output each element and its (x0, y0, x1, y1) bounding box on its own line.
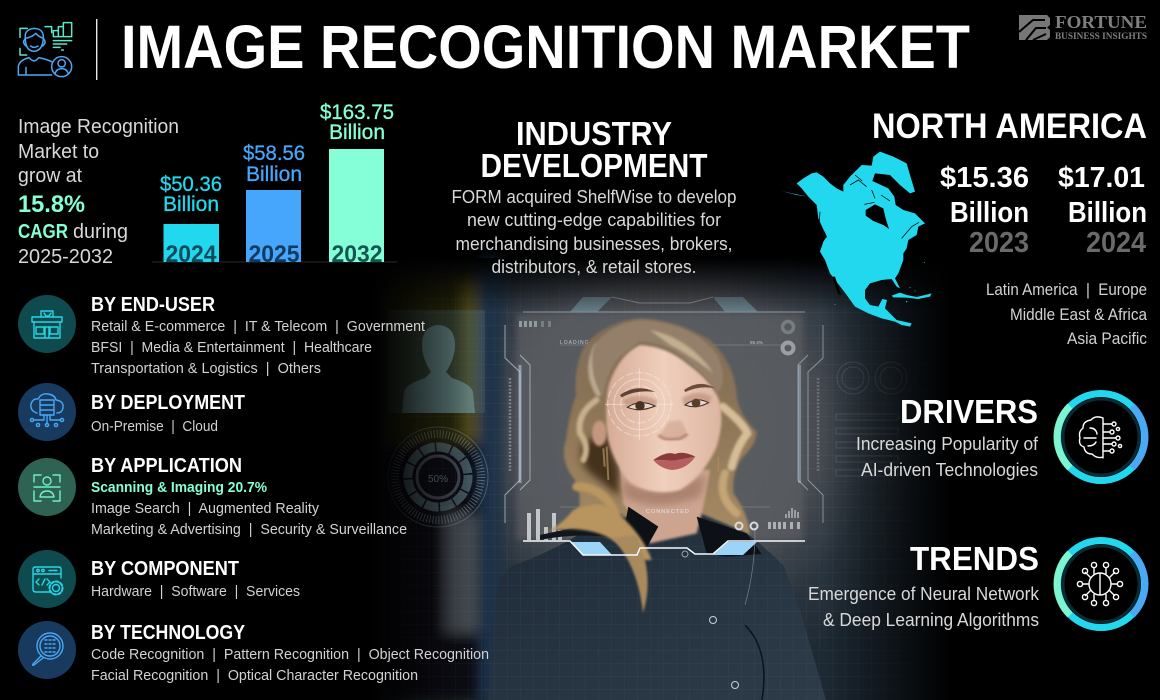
icon: storefront (18, 295, 76, 353)
bar 2024: Billion (163, 193, 219, 216)
industry development: distributors, & retail stores. (492, 257, 696, 277)
CAGR text block (18, 116, 179, 268)
north america values 2024: Billion (1068, 197, 1147, 229)
segment: by component (18, 550, 300, 608)
north america values 2023: 2023 (969, 227, 1029, 259)
lips (653, 453, 695, 461)
blond waves (577, 347, 747, 513)
segment: by application: Marketing & Advertising | Security & Surveillance (91, 521, 407, 538)
segment: by component: Hardware | Software | Services (91, 583, 300, 600)
face (606, 345, 721, 492)
north america values 2023: Billion (950, 197, 1029, 229)
bar 2025: 2025 (248, 241, 300, 268)
bar 2024: 2024 (166, 241, 217, 268)
nose (658, 434, 687, 440)
neck (620, 467, 710, 543)
logo: Fortune Business Insights: BUSINESS INSIGHTS (1055, 31, 1147, 41)
other regions: Middle East & Africa (1010, 306, 1148, 324)
bar 2032: $163.75 (320, 101, 394, 124)
bar 2025: Billion (246, 163, 302, 186)
HUD panel: 95.4% (750, 340, 763, 345)
north america values 2023 (940, 162, 1029, 259)
icon: trends neural network ring (1057, 540, 1145, 628)
CAGR text block: during (73, 221, 128, 243)
segment: by component: BY COMPONENT (91, 558, 239, 580)
eye sockets (623, 396, 657, 407)
photo: woman with face-recognition HUD (365, 258, 960, 700)
segment: by deployment: BY DEPLOYMENT (91, 392, 245, 414)
segment: by technology: Code Recognition | Pattern Recognition | Object Recognition (91, 646, 489, 663)
segment: by application: Image Search | Augmented Reality (91, 500, 319, 517)
CAGR text block: Market to (18, 141, 99, 163)
segment: by technology: BY TECHNOLOGY (91, 622, 246, 644)
logo: Fortune Business Insights: FORTUNE (1055, 12, 1147, 32)
segment: by end-user (18, 294, 426, 377)
loading dial (388, 427, 488, 527)
eyes (627, 403, 655, 410)
industry development: FORM acquired ShelfWise to develop (452, 187, 736, 207)
industry development (452, 115, 736, 277)
back hair (560, 318, 757, 535)
ghost HUD right (836, 362, 945, 476)
header divider (96, 19, 97, 80)
head traced at 3x (540, 318, 762, 560)
bangs (592, 320, 723, 397)
segment: by end-user: Transportation & Logistics | Others (91, 360, 321, 377)
segment: by deployment: On-Premise | Cloud (91, 418, 218, 435)
bar 2025 (243, 142, 305, 268)
other regions (986, 281, 1148, 348)
strand over collar (543, 505, 652, 560)
trends text: Emergence of Neural Network (808, 584, 1040, 604)
silhouette card (388, 310, 485, 413)
earrings (603, 447, 608, 480)
bar 2032: Billion (329, 121, 385, 144)
bar 2024 (160, 173, 222, 268)
title: IMAGE RECOGNITION MARKET (121, 13, 970, 81)
industry development: new cutting-edge capabilities for (467, 210, 721, 230)
icon: person scan (18, 458, 76, 516)
CAGR text block: 2025-2032 (18, 246, 113, 268)
bar 2024: $50.36 (160, 173, 222, 196)
north america values 2024: 2024 (1086, 227, 1146, 259)
HUD lower bar: CONNECTED (646, 509, 690, 515)
segment: by application: BY APPLICATION (91, 455, 242, 477)
trends text: TRENDS (910, 540, 1039, 577)
collar (623, 507, 658, 557)
bar 2032: 2032 (332, 241, 382, 268)
loading dial: 50% (428, 474, 448, 485)
bar chart: market size (152, 101, 397, 268)
photo edge fades (365, 258, 478, 700)
HUD panel (505, 297, 823, 540)
drivers text: DRIVERS (900, 393, 1038, 430)
segment: by technology (18, 621, 489, 684)
segment: by end-user: Retail & E-commerce | IT & Telecom | Government (91, 318, 426, 335)
industry development: merchandising businesses, brokers, (456, 234, 732, 254)
HUD panel: LOADING (560, 340, 590, 346)
segment: by application: Scanning & Imaging 20.7% (91, 480, 267, 496)
hair shadow near neck (581, 430, 620, 497)
icon: magnifier over code (18, 621, 76, 679)
shirt (488, 510, 826, 700)
trends text: & Deep Learning Algorithms (823, 610, 1039, 630)
bar 2025: $58.56 (243, 142, 305, 165)
north america values 2023: $15.36 (940, 162, 1029, 194)
other regions: Asia Pacific (1067, 330, 1147, 348)
CAGR text block: Image Recognition (18, 116, 179, 138)
industry development: DEVELOPMENT (480, 147, 708, 184)
icon: code window with gear (18, 550, 76, 608)
trends text (808, 540, 1040, 630)
segment: by end-user: BFSI | Media & Entertainment | Healthcare (91, 339, 372, 356)
industry development: INDUSTRY (516, 115, 672, 152)
eyebrows (620, 388, 655, 397)
segment: by end-user: BY END-USER (91, 294, 215, 316)
CAGR text block: CAGR (18, 221, 68, 243)
north america values 2024: $17.01 (1058, 162, 1145, 194)
ear (592, 421, 607, 446)
map: North America (782, 152, 932, 327)
cheek shading (658, 420, 687, 441)
icon: cloud server (18, 383, 76, 441)
target rings (605, 368, 673, 440)
drivers text: AI-driven Technologies (861, 460, 1038, 480)
segment: by deployment (18, 383, 245, 441)
other regions: Latin America | Europe (986, 281, 1147, 299)
woman (488, 318, 826, 700)
segment: by application (18, 455, 407, 538)
north america values 2024 (1058, 162, 1147, 259)
CAGR text block: grow at (18, 165, 82, 187)
drivers text (856, 393, 1039, 480)
segment: by technology: Facial Recognition | Optical Character Recognition (91, 667, 418, 684)
CAGR text block: 15.8% (18, 191, 85, 218)
header icon: face scan (18, 23, 72, 77)
HUD lower bar (523, 509, 805, 555)
bar 2032 (320, 101, 394, 268)
logo: Fortune Business Insights (1019, 12, 1147, 41)
icon: drivers brain ring (1057, 394, 1145, 480)
drivers text: Increasing Popularity of (856, 434, 1039, 454)
